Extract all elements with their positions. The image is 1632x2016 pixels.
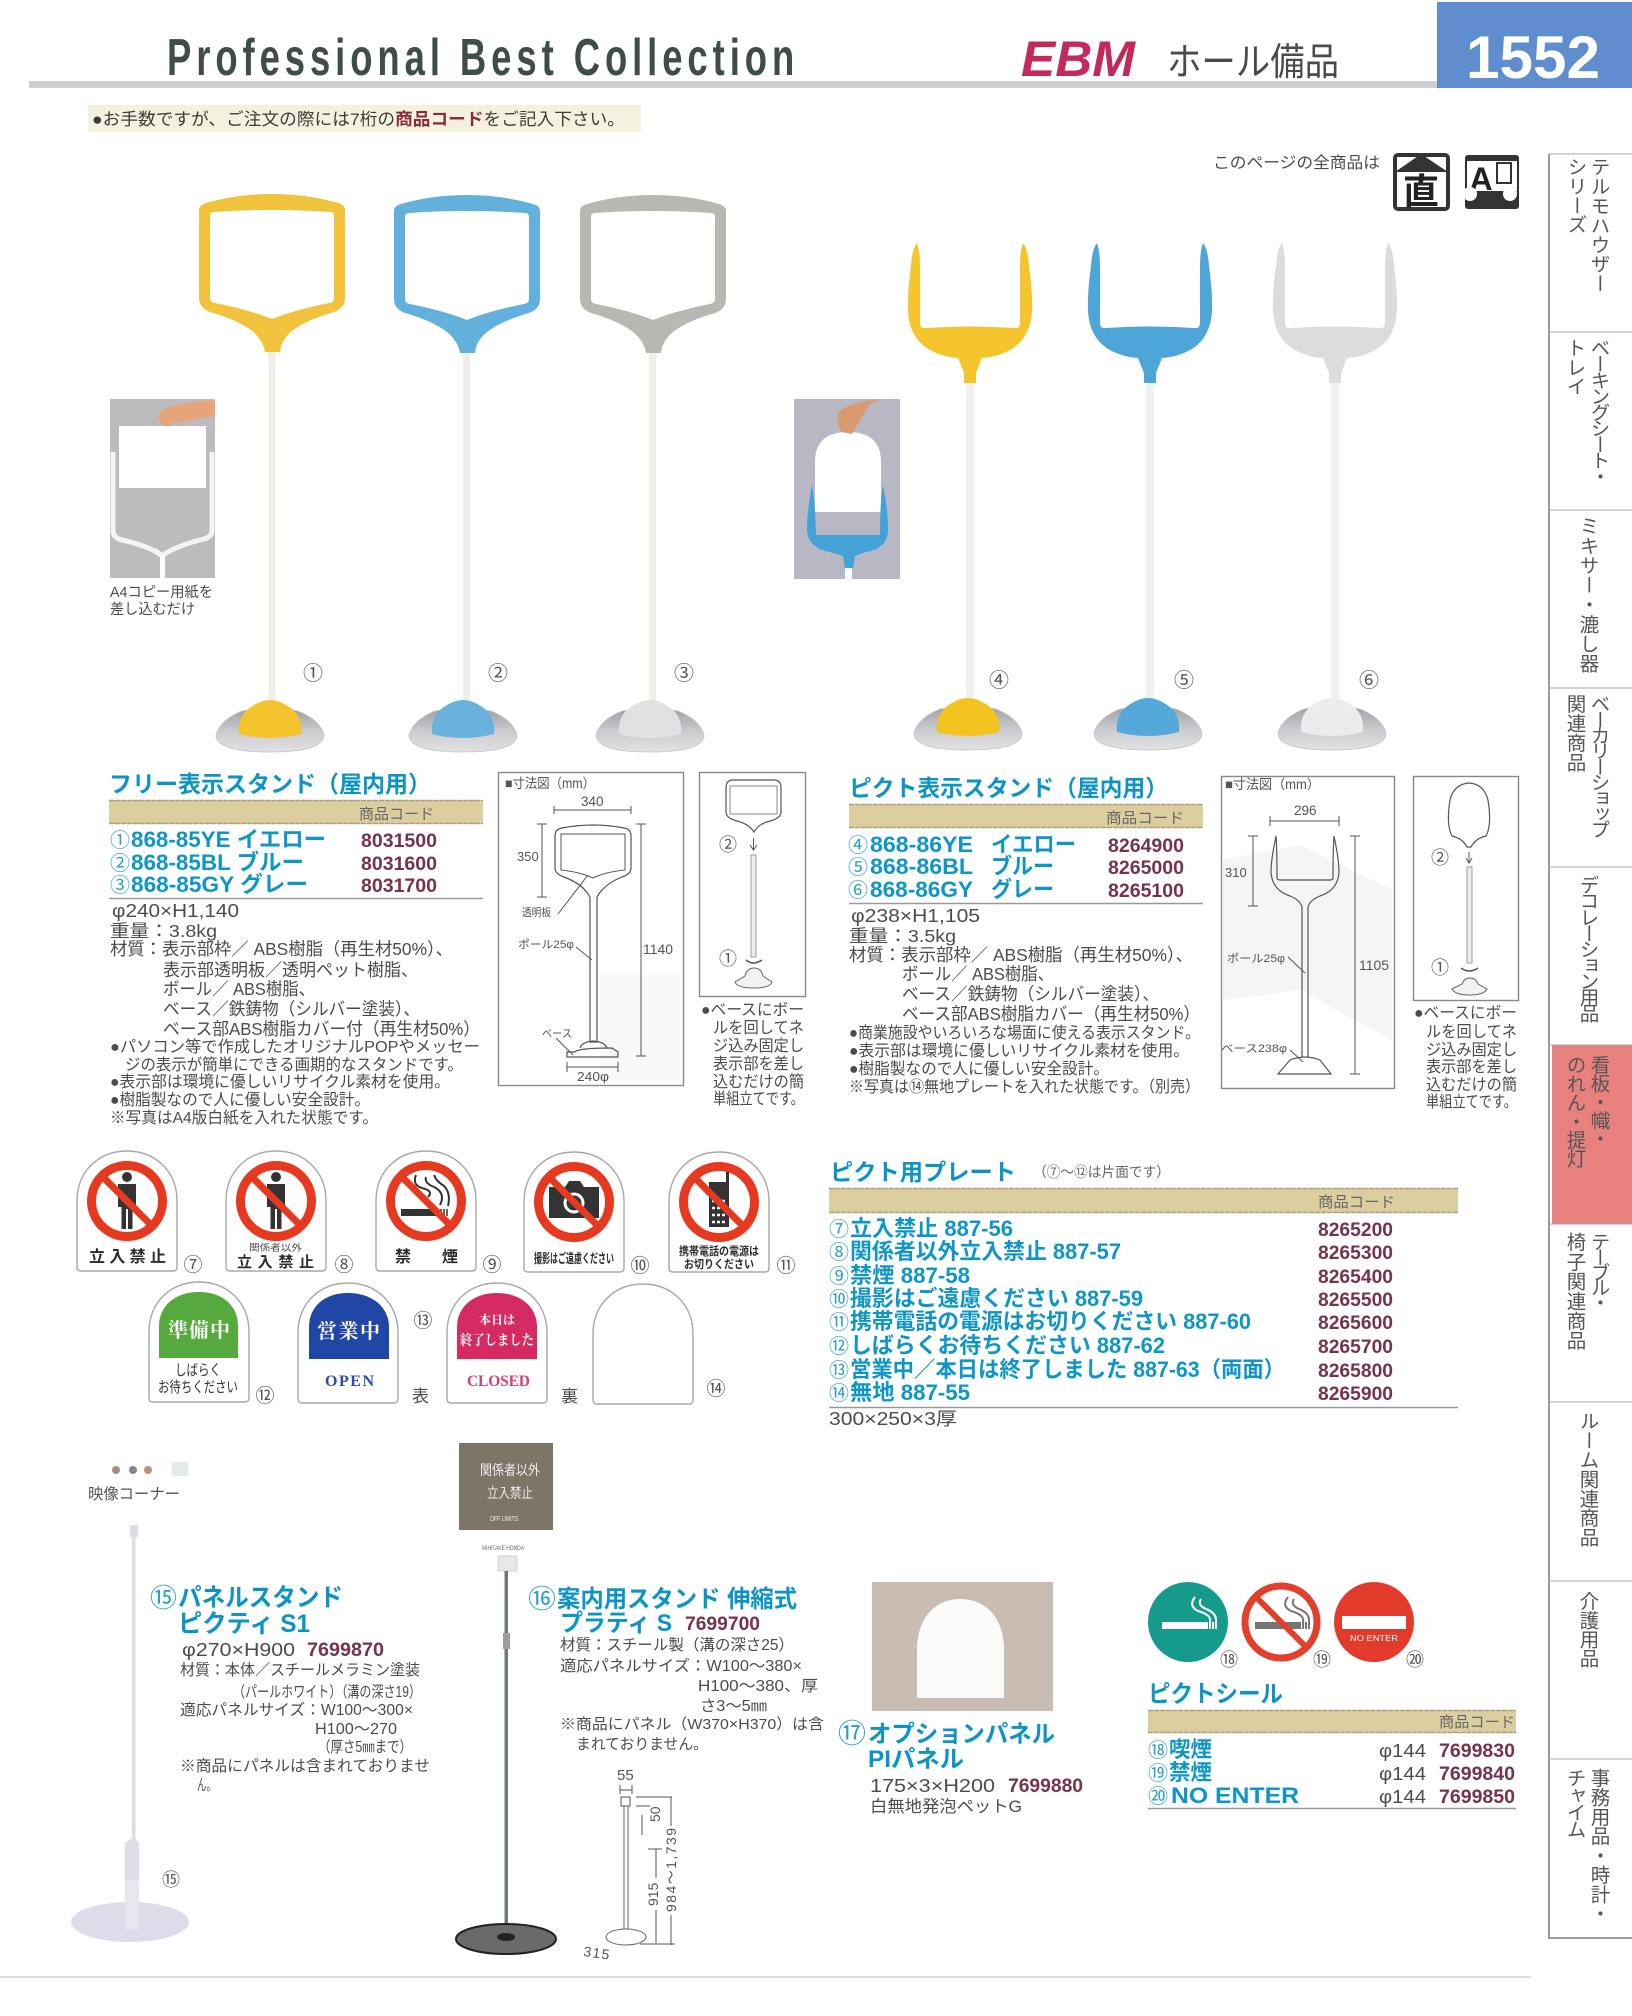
row 7: 8265200 bbox=[1318, 1220, 1393, 1241]
row 10 bbox=[829, 1286, 1393, 1311]
inset caption bbox=[110, 584, 213, 618]
row 14: 無地 887-55 bbox=[850, 1380, 970, 1405]
diagram: guide stand dimensions bbox=[583, 1767, 679, 1963]
diagram: free stand dimensions: 240φ bbox=[577, 1069, 609, 1084]
specifications text: ジの表示が簡単にできる画期的なスタンドです。 bbox=[125, 1056, 463, 1074]
row 5: ブルー bbox=[991, 854, 1054, 879]
number 12: ⑫ bbox=[255, 1385, 275, 1407]
diagram: pict stand dimensions: ■寸法図（mm） bbox=[1225, 777, 1320, 792]
row 8 bbox=[829, 1239, 1393, 1264]
row 18 bbox=[1148, 1737, 1515, 1762]
sidebar: category index: テーブル・ bbox=[1587, 1232, 1609, 1312]
row 3: 8031700 bbox=[361, 876, 437, 897]
assembly note: ジ込み固定し bbox=[713, 1037, 804, 1055]
diagram: free stand dimensions: 340 bbox=[581, 794, 604, 809]
row 7: 立入禁止 887-56 bbox=[850, 1216, 1013, 1241]
assembly note: ●ベースにボー bbox=[701, 1001, 804, 1019]
diagram: free stand assembly: ① bbox=[719, 949, 737, 969]
item numbers 4 to 6 bbox=[989, 669, 1379, 692]
row 1: 8031500 bbox=[361, 831, 437, 852]
spec text: ※商品にパネル（W370×H370）は含 bbox=[560, 1716, 824, 1733]
heading note: （⑦～⑫は片面です） bbox=[1033, 1164, 1170, 1180]
row 20: φ144 bbox=[1379, 1787, 1426, 1807]
heading: フリー表示スタンド（屋内用） bbox=[109, 771, 431, 797]
spec text: まれておりません。 bbox=[576, 1736, 708, 1753]
row 18: φ144 bbox=[1379, 1741, 1426, 1761]
assembly note: 込むだけの簡 bbox=[1426, 1076, 1517, 1094]
table header bbox=[849, 804, 1203, 828]
icon: no enter sticker: NO ENTER bbox=[1350, 1633, 1398, 1643]
specifications text: ●商業施設やいろいろな場面に使える表示スタンド。 bbox=[849, 1024, 1200, 1042]
diagram: pict stand dimensions: 1105 bbox=[1359, 957, 1389, 973]
row 4: 8264900 bbox=[1108, 836, 1184, 857]
diagram: pict stand dimensions: ポール25φ bbox=[1227, 952, 1285, 965]
diagram: free stand assembly bbox=[700, 772, 806, 996]
panel: pict seal list bbox=[1148, 1681, 1516, 1808]
specifications text: ベース部ABS樹脂カバー（再生材50%） bbox=[902, 1004, 1200, 1024]
diagram: pict stand dimensions: 296 bbox=[1294, 803, 1317, 818]
specifications text: ●表示部は環境に優しいリサイクル素材を使用。 bbox=[110, 1073, 450, 1091]
row 1: 868-85YE イエロー bbox=[131, 827, 326, 852]
panel: option panel text: 175×3×H200 bbox=[870, 1776, 995, 1796]
heading bbox=[528, 1584, 797, 1637]
diagram: free stand assembly: ② bbox=[719, 835, 737, 855]
specifications text: 表示部透明板／透明ペット樹脂、 bbox=[163, 960, 418, 980]
specifications text: φ240×H1,140 bbox=[112, 901, 239, 921]
diagram: free stand dimensions bbox=[498, 772, 684, 1086]
spec text: （厚さ5㎜まで） bbox=[318, 1738, 412, 1756]
inset caption: A4コピー用紙を bbox=[110, 584, 213, 601]
row 20: NO ENTER bbox=[1171, 1783, 1299, 1808]
page number tab: 1552 bbox=[1466, 24, 1600, 91]
spec text: さ3～5㎜ bbox=[700, 1697, 767, 1715]
panel: panel stand text bbox=[150, 1583, 430, 1794]
plate 7: no entry: 立入禁止 bbox=[89, 1248, 166, 1266]
photo: free display stand gray bbox=[580, 195, 726, 752]
row 13: 営業中／本日は終了しました 887-63（両面） bbox=[850, 1357, 1285, 1382]
specifications text: φ238×H1,105 bbox=[851, 906, 980, 926]
row 14 bbox=[829, 1380, 1393, 1405]
row 19: ⑲ bbox=[1148, 1762, 1168, 1785]
photo: guide stand Pratty S: MIHITAKE HONDA bbox=[482, 1546, 524, 1552]
icon: direct ship bbox=[1395, 154, 1448, 212]
row 2: 868-85BL ブルー bbox=[131, 850, 304, 875]
order note strip: ●お手数ですが、ご注文の際には7桁の 商品コードをご記入下さい。 bbox=[92, 109, 625, 129]
row 6: ⑥ bbox=[848, 879, 868, 902]
diagram: pict stand dimensions: ベース238φ bbox=[1221, 1043, 1287, 1055]
diagram: guide stand dimensions: 50 bbox=[647, 1806, 663, 1822]
assembly note: 込むだけの簡 bbox=[713, 1073, 804, 1091]
specifications text: ●表示部は環境に優しいリサイクル素材を使用。 bbox=[849, 1042, 1189, 1060]
plate 9: no smoking: 禁 煙 bbox=[395, 1248, 458, 1266]
sidebar: category index bbox=[1549, 154, 1632, 1938]
spec text: 材質：スチール製（溝の深さ25） bbox=[560, 1636, 794, 1654]
assembly note: 表示部を差し bbox=[1426, 1058, 1517, 1076]
row 10: 8265500 bbox=[1318, 1290, 1393, 1311]
row 13: ⑬ bbox=[829, 1359, 849, 1382]
assembly note: ルを回してネ bbox=[713, 1019, 804, 1037]
sidebar: category index: ルーム関連商品 bbox=[1576, 1411, 1599, 1547]
diagram: pict stand dimensions: 310 bbox=[1225, 865, 1247, 880]
table header bbox=[109, 800, 483, 824]
panel: pict display stand spec bbox=[848, 775, 1203, 1096]
plate 13 front: open: OPEN bbox=[325, 1373, 374, 1390]
plate 13 back: closed: CLOSED bbox=[467, 1373, 530, 1390]
sidebar: category index: 介護用品 bbox=[1576, 1591, 1599, 1668]
plate 13 front: open: 営業中 bbox=[317, 1320, 380, 1343]
row 19 bbox=[1148, 1760, 1515, 1785]
row 20 bbox=[1148, 1783, 1515, 1808]
number 11: ⑪ bbox=[776, 1255, 796, 1277]
plate 12: please wait: しばらく bbox=[175, 1362, 221, 1379]
plate 9: no smoking bbox=[376, 1151, 476, 1271]
row 9: 8265400 bbox=[1318, 1267, 1393, 1288]
icon: direct ship: 直 bbox=[1403, 171, 1439, 212]
table header bbox=[829, 1188, 1458, 1213]
spec text: （パールホワイト）（溝の深さ19） bbox=[233, 1683, 421, 1701]
diagram: free stand dimensions: 透明板 bbox=[522, 905, 551, 919]
header rule bbox=[29, 81, 1437, 88]
plate 12: please wait bbox=[149, 1282, 249, 1402]
row 5: 868-86BL bbox=[870, 854, 973, 879]
number 14: ⑭ bbox=[706, 1378, 726, 1400]
spec text bbox=[180, 1640, 430, 1794]
spec text: ん。 bbox=[197, 1777, 216, 1794]
panel: option panel text: オプションパネル bbox=[868, 1721, 1055, 1748]
photo: panel stand S1 bbox=[71, 1462, 189, 1942]
row 8: 8265300 bbox=[1318, 1243, 1393, 1264]
icon: truck A bbox=[1463, 155, 1519, 209]
heading: 案内用スタンド 伸縮式 bbox=[557, 1586, 797, 1613]
sidebar: category index: ミキサー・漉し器 bbox=[1576, 516, 1599, 673]
specifications text: 材質：表示部枠／ ABS樹脂（再生材50%）、 bbox=[849, 945, 1193, 965]
row 12: 8265700 bbox=[1318, 1337, 1393, 1358]
item numbers 4 to 6: ⑤ bbox=[1174, 669, 1194, 692]
row 4 bbox=[848, 832, 1184, 857]
table header bbox=[1148, 1710, 1516, 1733]
diagram: guide stand dimensions: 315 bbox=[583, 1943, 611, 1963]
row 8: 関係者以外立入禁止 887-57 bbox=[850, 1239, 1121, 1264]
row 11: 携帯電話の電源はお切りください 887-60 bbox=[850, 1309, 1251, 1334]
assembly note: ルを回してネ bbox=[1426, 1023, 1517, 1041]
row 9: ⑨ bbox=[829, 1265, 849, 1288]
row 1 bbox=[110, 827, 437, 852]
table header: 商品コード bbox=[1439, 1714, 1515, 1731]
assembly note: 表示部を差し bbox=[713, 1055, 804, 1073]
specifications text: ベース／鉄鋳物（シルバー塗装）、 bbox=[902, 984, 1159, 1004]
inset caption: 差し込むだけ bbox=[110, 601, 195, 618]
row 10: 撮影はご遠慮ください 887-59 bbox=[850, 1286, 1143, 1311]
diagram: pict stand dimensions bbox=[1221, 776, 1394, 1088]
row 2: 8031600 bbox=[361, 854, 437, 875]
row 12: しばらくお待ちください 887-62 bbox=[850, 1333, 1165, 1358]
photo: panel stand S1: 映像コーナー bbox=[88, 1485, 180, 1503]
heading: パネルスタンド bbox=[178, 1584, 343, 1612]
spec text: 適応パネルサイズ：W100～300× bbox=[180, 1701, 413, 1719]
panel: free display stand spec bbox=[109, 771, 483, 1127]
row 6: 868-86GY bbox=[870, 877, 973, 902]
row 5: ⑤ bbox=[848, 856, 868, 879]
sidebar: category index: 事務用品・時計・ bbox=[1587, 1768, 1610, 1923]
row 11: ⑪ bbox=[829, 1311, 849, 1334]
heading: ピクト表示スタンド（屋内用） bbox=[849, 775, 1168, 801]
row 20: 7699850 bbox=[1439, 1787, 1515, 1808]
plate 7: no entry bbox=[77, 1151, 177, 1271]
delivery caption: このページの全商品は bbox=[1213, 154, 1380, 172]
photo: guide stand Pratty S bbox=[456, 1443, 556, 1954]
spec text: 7699870 bbox=[307, 1640, 384, 1661]
logo: EBM: EBM bbox=[1021, 31, 1136, 87]
number 19: ⑲ bbox=[1313, 1650, 1331, 1670]
sidebar: category index: トレイ bbox=[1563, 338, 1585, 396]
item numbers 1 to 3: ② bbox=[488, 662, 508, 685]
number 9: ⑨ bbox=[482, 1254, 502, 1276]
assembly note bbox=[1414, 1004, 1517, 1111]
spec text: H100～270 bbox=[315, 1721, 397, 1738]
number 13: ⑬ bbox=[413, 1310, 433, 1332]
table header: 商品コード bbox=[359, 806, 434, 823]
specifications text: ●パソコン等で作成したオリジナルPOPやメッセー bbox=[110, 1038, 480, 1056]
diagram: free stand dimensions: ■寸法図（mm） bbox=[505, 776, 595, 791]
table header: 商品コード bbox=[1106, 810, 1184, 827]
plate 11: phone off bbox=[669, 1152, 769, 1272]
specifications text: 重量：3.8kg bbox=[110, 921, 217, 941]
diagram: pict stand assembly bbox=[1414, 776, 1518, 1000]
heading: ピクティ S1 bbox=[178, 1610, 310, 1638]
plate 8: staff only: 関係者以外 bbox=[249, 1242, 303, 1254]
row 6: 8265100 bbox=[1108, 881, 1184, 902]
icon: no smoking sticker bbox=[1245, 1586, 1317, 1658]
specifications text: 重量：3.5kg bbox=[849, 926, 956, 946]
plate 11: phone off: お切りください bbox=[684, 1258, 754, 1271]
photo: guide stand Pratty S: OFF LIMITS bbox=[490, 1516, 518, 1523]
row 3: 868-85GY グレー bbox=[131, 872, 308, 897]
category heading: ホール備品 bbox=[1167, 42, 1339, 84]
diagram: guide stand dimensions: 984～1,739 bbox=[663, 1828, 679, 1912]
row 5: 8265000 bbox=[1108, 858, 1184, 879]
label: back: 裏 bbox=[561, 1387, 578, 1406]
plate 13 back: closed: 終了しました bbox=[460, 1332, 534, 1349]
photo: option panel bbox=[872, 1582, 1053, 1711]
number 10: ⑩ bbox=[630, 1255, 650, 1277]
number 18: ⑱ bbox=[1220, 1650, 1238, 1670]
photo: free display stand yellow bbox=[199, 194, 345, 752]
page number tab bbox=[1437, 2, 1632, 91]
specifications text: 材質：表示部枠／ ABS樹脂（再生材50%）、 bbox=[110, 939, 453, 959]
row 14: ⑭ bbox=[829, 1382, 849, 1405]
row 2: ② bbox=[110, 852, 130, 875]
row 13: 8265800 bbox=[1318, 1361, 1393, 1382]
photo: pict display stand gray bbox=[1273, 243, 1397, 750]
row 4: イエロー bbox=[991, 832, 1076, 857]
diagram: free stand dimensions: 350 bbox=[517, 849, 539, 864]
photo: pict display stand blue bbox=[1088, 243, 1212, 750]
sidebar: category index: のれん・提灯 bbox=[1563, 1055, 1586, 1168]
sidebar: category index: 椅子関連商品 bbox=[1563, 1232, 1586, 1350]
sidebar: category index: デコレーション用品 bbox=[1576, 875, 1599, 1023]
panel: option panel text bbox=[838, 1719, 1083, 1816]
specifications text: ●樹脂製なので人に優しい安全設計。 bbox=[110, 1091, 370, 1109]
spec text: H100～380、厚 bbox=[698, 1678, 818, 1695]
spec text: 適応パネルサイズ：W100～380× bbox=[560, 1657, 802, 1675]
item numbers 1 to 3: ③ bbox=[674, 662, 694, 685]
row 9: 禁煙 887-58 bbox=[850, 1263, 970, 1288]
size note: 300×250×3厚 bbox=[829, 1409, 957, 1429]
heading bbox=[150, 1583, 343, 1638]
diagram: pict stand assembly: ② bbox=[1431, 848, 1449, 868]
panel: option panel text: ⑰ bbox=[838, 1719, 866, 1749]
heading: ピクト用プレート bbox=[830, 1159, 1016, 1185]
plate 14: blank bbox=[593, 1284, 693, 1404]
sidebar: category index: テルモハウザー bbox=[1587, 157, 1609, 293]
title: Professional Best Collection: Professional Best Collection bbox=[167, 27, 794, 87]
photo: free display stand blue bbox=[394, 195, 540, 752]
row 6: グレー bbox=[991, 877, 1054, 902]
specifications text: ボール／ ABS樹脂、 bbox=[163, 979, 315, 999]
icon: no enter sticker bbox=[1334, 1582, 1414, 1662]
assembly note: 単組立てです。 bbox=[713, 1090, 804, 1108]
heading: ⑯ bbox=[528, 1584, 556, 1614]
row 7: ⑦ bbox=[829, 1218, 849, 1241]
diagram: pict stand assembly: ① bbox=[1431, 958, 1449, 978]
specifications text: ●樹脂製なので人に優しい安全設計。 bbox=[849, 1060, 1109, 1078]
plate 11: phone off: 携帯電話の電源は bbox=[679, 1244, 759, 1258]
assembly note: ●ベースにボー bbox=[1414, 1004, 1517, 1022]
panel: guide stand text bbox=[528, 1584, 824, 1753]
plate 10: no photography: 撮影はご遠慮ください bbox=[534, 1251, 614, 1266]
item numbers 1 to 3: ① bbox=[303, 662, 323, 685]
table header: 商品コード bbox=[1318, 1194, 1395, 1211]
number 20: ⑳ bbox=[1406, 1650, 1424, 1670]
spec text: 材質：本体／スチールメラミン塗装 bbox=[180, 1661, 420, 1679]
row 8: ⑧ bbox=[829, 1241, 849, 1264]
row 1: ① bbox=[110, 829, 130, 852]
row 4: 868-86YE bbox=[870, 832, 973, 857]
plate 10: no photography bbox=[524, 1152, 624, 1272]
spec text: ※商品にパネルは含まれておりませ bbox=[180, 1757, 430, 1775]
inset photo: inserting plate bbox=[794, 399, 900, 579]
heading: ピクトシール bbox=[1148, 1681, 1283, 1708]
spec text: φ270×H900 bbox=[182, 1640, 295, 1660]
number 7: ⑦ bbox=[183, 1254, 203, 1276]
row 11: 8265600 bbox=[1318, 1313, 1393, 1334]
specifications text: ※写真は⑭無地プレートを入れた状態です。（別売） bbox=[849, 1078, 1200, 1096]
sidebar: category index: ベーカリーショップ bbox=[1587, 694, 1609, 839]
row 4: ④ bbox=[848, 834, 868, 857]
plate 13 back: closed bbox=[447, 1283, 547, 1403]
diagram: guide stand dimensions: 915 bbox=[645, 1882, 661, 1906]
plate 13 back: closed: 本日は bbox=[479, 1312, 515, 1327]
photo: guide stand Pratty S: 関係者以外 bbox=[480, 1462, 540, 1478]
row 19: φ144 bbox=[1379, 1764, 1426, 1784]
photo: guide stand Pratty S: 立入禁止 bbox=[487, 1485, 533, 1501]
diagram: free stand dimensions: 1140 bbox=[643, 941, 673, 957]
row 7 bbox=[829, 1216, 1393, 1241]
row 3: ③ bbox=[110, 874, 130, 897]
row 6 bbox=[848, 877, 1184, 902]
assembly note: ジ込み固定し bbox=[1426, 1041, 1517, 1059]
specifications text: ※写真はA4版白紙を入れた状態です。 bbox=[110, 1109, 378, 1127]
panel: option panel text: 白無地発泡ペットG bbox=[870, 1797, 1022, 1816]
panel: option panel text: 7699880 bbox=[1008, 1776, 1083, 1797]
diagram: free stand dimensions: ポール25φ bbox=[518, 938, 574, 951]
row 19: 禁煙 bbox=[1169, 1760, 1212, 1785]
spec text bbox=[560, 1636, 824, 1753]
sidebar: category index: ベーキングシート・ bbox=[1587, 338, 1609, 486]
item numbers 4 to 6: ⑥ bbox=[1359, 669, 1379, 692]
specifications text: ベース部ABS樹脂カバー付（再生材50%） bbox=[163, 1019, 480, 1039]
plate 12: please wait: 準備中 bbox=[168, 1318, 230, 1342]
plate 12: please wait: お待ちください bbox=[158, 1379, 238, 1396]
row 18: 喫煙 bbox=[1169, 1737, 1212, 1762]
specifications text bbox=[110, 901, 480, 1127]
row 10: ⑩ bbox=[829, 1288, 849, 1311]
diagram: free stand dimensions: ベース bbox=[542, 1028, 572, 1040]
row 3 bbox=[110, 872, 437, 897]
icon: smoking sticker bbox=[1148, 1582, 1228, 1662]
label: front: 表 bbox=[412, 1387, 429, 1406]
specifications text: ボール／ ABS樹脂、 bbox=[902, 964, 1054, 984]
plate 13 front: open bbox=[298, 1283, 398, 1403]
item numbers 4 to 6: ④ bbox=[989, 669, 1009, 692]
row 20: ⑳ bbox=[1148, 1785, 1168, 1808]
assembly note: 単組立てです。 bbox=[1426, 1093, 1517, 1111]
row 12: ⑫ bbox=[829, 1335, 849, 1358]
sidebar: category index: チャイム bbox=[1563, 1768, 1585, 1839]
panel: pict plates list bbox=[829, 1159, 1458, 1429]
diagram: guide stand dimensions: 55 bbox=[617, 1767, 634, 1784]
photo: pict display stand yellow bbox=[908, 243, 1032, 750]
row 12 bbox=[829, 1333, 1393, 1358]
sidebar: category index: シリーズ bbox=[1564, 157, 1586, 234]
number 15: ⑮ bbox=[162, 1870, 180, 1890]
sidebar: category index: 看板・幟・ bbox=[1587, 1055, 1610, 1148]
row 18: ⑱ bbox=[1148, 1739, 1168, 1762]
heading: ⑮ bbox=[150, 1583, 177, 1613]
specifications text bbox=[849, 906, 1200, 1096]
inset photo: inserting A4 paper bbox=[110, 399, 215, 578]
specifications text: ベース／鉄鋳物（シルバー塗装）、 bbox=[163, 999, 420, 1019]
icon: truck A: A bbox=[1469, 161, 1493, 197]
row 5 bbox=[848, 854, 1184, 879]
plate 8: staff only: 立入禁止 bbox=[237, 1254, 314, 1271]
assembly note bbox=[701, 1001, 804, 1108]
number 8: ⑧ bbox=[334, 1254, 354, 1276]
panel: option panel text: PIパネル bbox=[868, 1746, 964, 1773]
row 2 bbox=[110, 850, 437, 875]
row 19: 7699840 bbox=[1439, 1764, 1515, 1785]
row 9 bbox=[829, 1263, 1393, 1288]
order note strip bbox=[88, 105, 641, 132]
plate 8: staff only bbox=[226, 1151, 326, 1271]
heading: 7699700 bbox=[685, 1614, 760, 1635]
item numbers 1 to 3 bbox=[303, 662, 694, 685]
row 18: 7699830 bbox=[1439, 1741, 1515, 1762]
heading: プラティ S bbox=[560, 1610, 672, 1637]
sidebar: category index: 関連商品 bbox=[1563, 694, 1586, 772]
row 14: 8265900 bbox=[1318, 1384, 1393, 1405]
